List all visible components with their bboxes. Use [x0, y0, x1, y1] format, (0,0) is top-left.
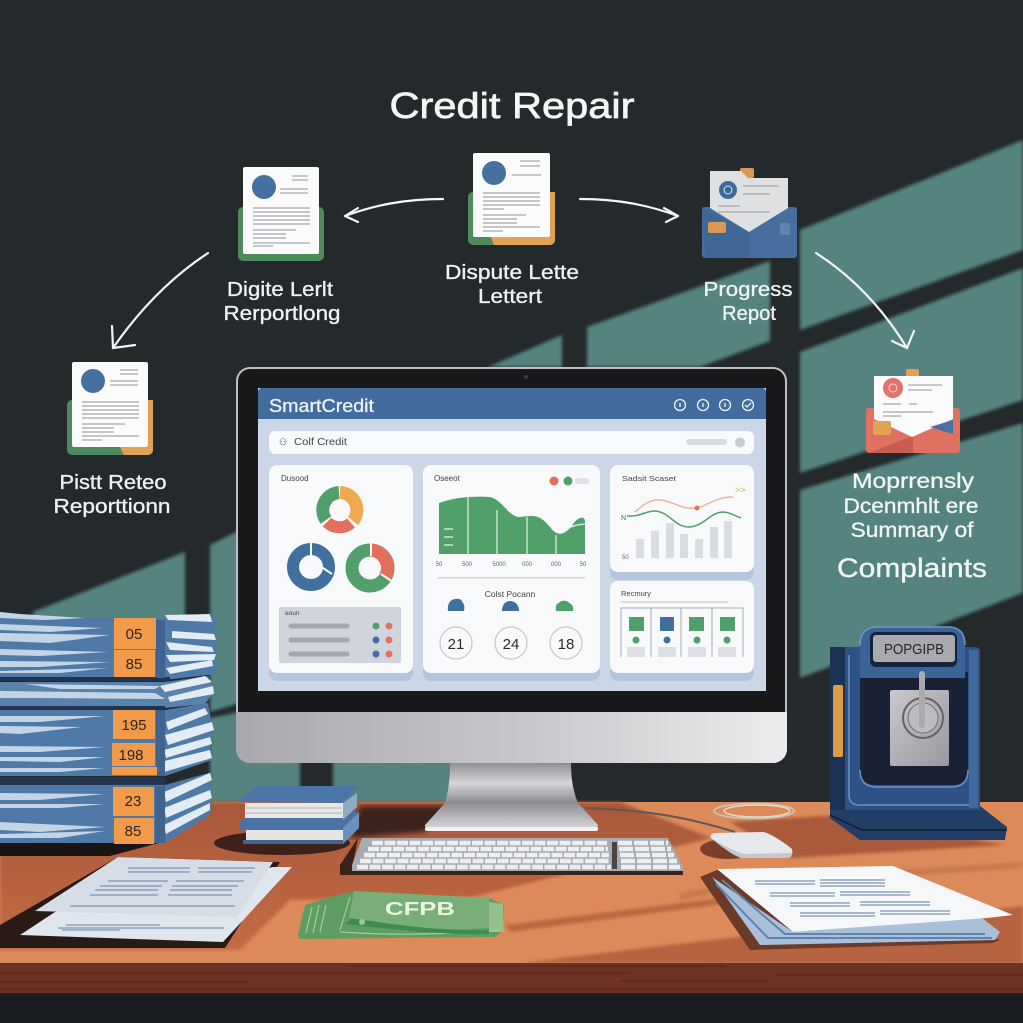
list box: eoun	[285, 610, 300, 617]
money bundle CFPB: CFPB	[385, 899, 455, 919]
panel shadows	[269, 470, 754, 681]
donut chart 2	[293, 542, 332, 585]
stacked books	[214, 786, 359, 855]
label: summary of complaints: Summary of	[850, 518, 974, 542]
binder tabs: 198	[118, 747, 144, 764]
binder tabs: 85	[125, 823, 141, 840]
icon: document centre	[468, 153, 555, 245]
area chart: 5000	[492, 562, 506, 568]
label: pistt reteo reporttion: Reporttionn	[54, 495, 170, 518]
label: summary of complaints	[837, 469, 987, 583]
icon: document left lower	[67, 362, 153, 455]
desk	[0, 802, 1023, 1023]
stack of binders	[0, 612, 216, 856]
left paper streaks	[0, 612, 165, 838]
keyboard	[340, 838, 683, 875]
right paper edges	[160, 614, 216, 834]
panel: area chart: 18	[558, 636, 574, 653]
label: summary of complaints: Moprrensly	[852, 469, 974, 493]
icon: envelope red	[866, 369, 960, 453]
panel: line and bar chart: >>	[735, 485, 746, 495]
arrow: centre to left	[345, 199, 443, 222]
arrow: to left document	[112, 253, 208, 348]
area chart: 000	[551, 562, 562, 568]
label: dispute letter: Dispute Lette	[445, 261, 579, 284]
binder tabs	[112, 618, 157, 844]
panel: status grid: Recmury	[621, 589, 651, 598]
area chart: 500	[462, 562, 473, 568]
label: dispute letter: Lettert	[478, 285, 542, 308]
panel: donuts	[269, 465, 413, 673]
stamp machine	[830, 627, 1007, 840]
binder tabs: 23	[125, 793, 141, 810]
stamp machine: POPGIPB	[884, 642, 944, 658]
monitor	[236, 367, 787, 831]
panel: area chart: 21	[448, 636, 464, 653]
dashboard screen	[258, 388, 766, 691]
panel: area chart	[423, 465, 600, 673]
icon: envelope progress	[702, 168, 797, 258]
binder tabs: 195	[121, 717, 147, 734]
panel: line and bar chart: 50	[622, 555, 629, 561]
list box	[279, 607, 401, 663]
money bundle CFPB	[298, 891, 504, 939]
title: Credit Repair	[390, 85, 634, 126]
donut chart 1	[323, 492, 357, 527]
document papers left	[0, 857, 292, 948]
panel: line and bar chart: N	[621, 515, 626, 522]
area chart: 000	[522, 562, 533, 568]
search bar	[269, 431, 754, 454]
panel: status grid	[610, 581, 754, 673]
label: progress report: Repot	[722, 302, 776, 325]
panel: area chart: Oseeot	[434, 474, 461, 483]
binder tabs: 85	[126, 656, 142, 673]
binder tabs: 05	[126, 626, 142, 643]
area chart	[436, 497, 587, 568]
icon: document left	[238, 167, 324, 261]
panel: line and bar chart	[610, 465, 754, 572]
label: digite lerlt reporting: Rerportlong	[224, 302, 340, 325]
monitor stand	[425, 763, 598, 831]
dashboard header: SmartCredit	[269, 395, 374, 416]
panel: donuts: Dusood	[281, 474, 309, 483]
dashboard header	[258, 388, 766, 419]
label: summary of complaints: Dcenmhlt ere	[844, 494, 978, 518]
label: progress report	[704, 278, 792, 325]
search bar: ⚇	[279, 437, 287, 447]
label: digite lerlt reporting	[224, 278, 340, 325]
label: summary of complaints: Complaints	[837, 553, 987, 583]
document papers right	[700, 866, 1013, 950]
cable and mouse	[586, 804, 794, 859]
panel: area chart: 24	[503, 636, 519, 653]
label: pistt reteo reporttion: Pistt Reteo	[60, 471, 166, 494]
donut chart 3	[352, 543, 393, 586]
label: pistt reteo reporttion	[54, 471, 170, 518]
arrow: centre to right	[580, 199, 678, 222]
label: digite lerlt reporting: Digite Lerlt	[227, 278, 333, 301]
panel: area chart: Colst Pocann	[485, 589, 536, 599]
label: dispute letter	[445, 261, 579, 308]
search bar: Colf Credit	[294, 437, 347, 448]
label: progress report: Progress	[704, 278, 792, 301]
area chart: 50	[580, 562, 587, 568]
panel: line and bar chart: Sadsit Scaset	[622, 474, 677, 483]
area chart: 50	[436, 562, 443, 568]
arrow: to right envelope	[816, 253, 914, 348]
